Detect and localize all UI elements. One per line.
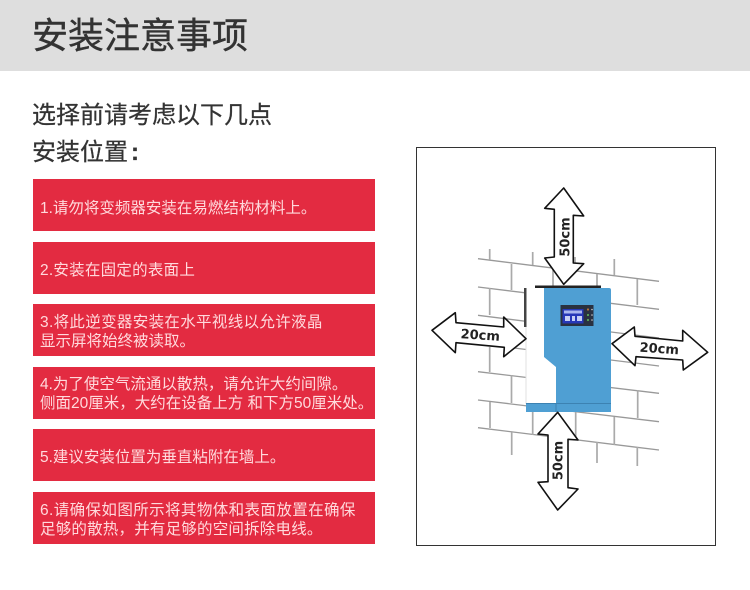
heading: installation position: 安装位置: bbox=[32, 139, 139, 166]
panel: note 2: 2.安装在固定的表面上 bbox=[40, 262, 195, 279]
panel: note 1: 1.请勿将变频器安装在易燃结构材料上。 bbox=[40, 200, 316, 217]
panel: note 3: 3.将此逆变器安装在水平视线以允许液晶 bbox=[40, 314, 323, 331]
intro text: 选择前请考虑以下几点 bbox=[32, 102, 272, 129]
panel: note 4: 侧面20厘米，大约在设备上方 和下方50厘米处。 bbox=[40, 394, 373, 412]
panel: note 3: 显示屏将始终被读取。 bbox=[40, 332, 195, 350]
panel: note 6 bbox=[33, 492, 375, 544]
panel: note 3 bbox=[33, 304, 375, 356]
arrow: right clearance 20cm bbox=[612, 327, 708, 370]
arrow: top clearance 50cm: 50cm bbox=[558, 217, 574, 257]
arrow: left clearance 20cm: 20cm bbox=[460, 327, 500, 345]
arrow: bottom clearance 50cm bbox=[538, 412, 578, 510]
panel: note 6: 6.请确保如图所示将其物体和表面放置在确保 bbox=[40, 502, 356, 519]
title: 安装注意事项 bbox=[32, 15, 248, 56]
panel: note 5: 5.建议安装位置为垂直粘附在墙上。 bbox=[40, 449, 285, 466]
arrow: bottom clearance 50cm: 50cm bbox=[552, 441, 566, 480]
panel: note 5 bbox=[33, 429, 375, 481]
arrow: top clearance 50cm bbox=[545, 188, 584, 284]
arrow: left clearance 20cm bbox=[432, 313, 526, 357]
brick wall bbox=[478, 249, 659, 466]
device display bbox=[560, 305, 594, 326]
panel: note 2 bbox=[33, 242, 375, 294]
arrow: right clearance 20cm: 20cm bbox=[639, 341, 679, 358]
inverter device bbox=[524, 286, 611, 412]
panel: note 4: 4.为了使空气流通以散热，请允许大约间隙。 bbox=[40, 376, 347, 393]
panel: note 6: 足够的散热，并有足够的空间拆除电线。 bbox=[40, 520, 323, 538]
panel: note 4 bbox=[33, 367, 375, 419]
panel: installation diagram frame bbox=[416, 147, 716, 546]
header band bbox=[0, 0, 750, 71]
panel: note 1 bbox=[33, 179, 375, 231]
